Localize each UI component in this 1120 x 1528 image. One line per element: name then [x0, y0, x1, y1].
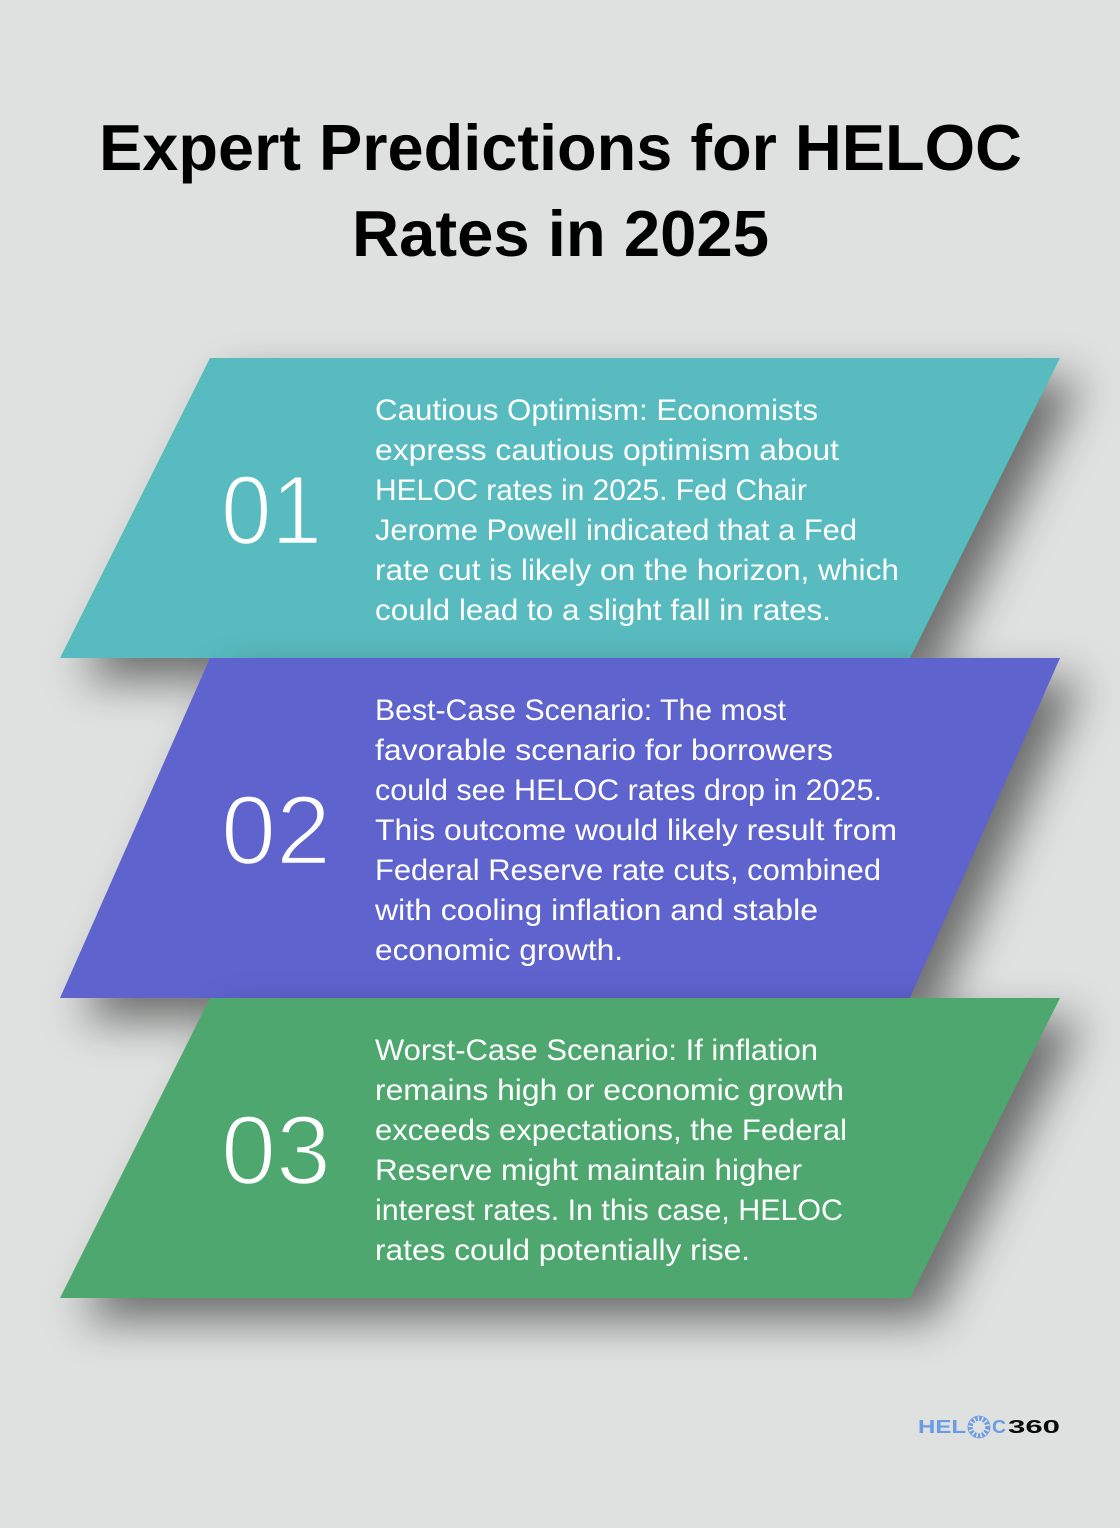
text block 02: with cooling inflation and stable — [374, 894, 818, 927]
purple parallelogram — [60, 658, 1060, 998]
text block 02: Best-Case Scenario: The most — [375, 694, 787, 727]
panel: 01 cautious optimism — [60, 358, 1060, 658]
text block 03: Worst-Case Scenario: If inflation — [375, 1034, 818, 1067]
logo: HELOC360: C — [992, 1417, 1006, 1437]
icon: logo swirl — [968, 1416, 990, 1438]
number 01: 01 — [221, 455, 322, 565]
panel: 02 best-case scenario — [60, 658, 1060, 998]
text block 02: Federal Reserve rate cuts, combined — [375, 854, 881, 887]
title — [99, 111, 1022, 270]
number 02: 02 — [221, 775, 331, 885]
text block 03: rates could potentially rise. — [375, 1234, 750, 1267]
text block 02: economic growth. — [375, 934, 623, 967]
text block 03: Reserve might maintain higher — [375, 1154, 802, 1187]
text block 01: express cautious optimism about — [375, 434, 840, 467]
green parallelogram — [60, 998, 1060, 1298]
title: Expert Predictions for HELOC — [99, 111, 1022, 184]
text block 02: This outcome would likely result from — [375, 814, 897, 847]
text block 02: favorable scenario for borrowers — [375, 734, 833, 767]
text block 03: interest rates. In this case, HELOC — [375, 1194, 843, 1227]
text block 03 — [375, 1034, 847, 1267]
logo: HELOC360: 360 — [1008, 1417, 1060, 1437]
text block 01: Jerome Powell indicated that a Fed — [375, 514, 857, 547]
logo: HELOC360 — [918, 1416, 1060, 1438]
panel: 03 worst-case scenario — [60, 998, 1060, 1298]
title: Rates in 2025 — [352, 197, 769, 270]
text block 01: HELOC rates in 2025. Fed Chair — [375, 474, 807, 507]
text block 03: exceeds expectations, the Federal — [375, 1114, 847, 1147]
text block 02 — [374, 694, 897, 967]
text block 01: rate cut is likely on the horizon, which — [375, 554, 899, 587]
number 03: 03 — [221, 1095, 331, 1205]
logo: HELOC360: HEL — [918, 1417, 966, 1437]
teal parallelogram — [60, 358, 1060, 658]
text block 01: could lead to a slight fall in rates. — [375, 594, 831, 627]
text block 03: remains high or economic growth — [375, 1074, 844, 1107]
text block 02: could see HELOC rates drop in 2025. — [375, 774, 882, 807]
text block 01: Cautious Optimism: Economists — [375, 394, 818, 427]
text block 01 — [375, 394, 899, 627]
